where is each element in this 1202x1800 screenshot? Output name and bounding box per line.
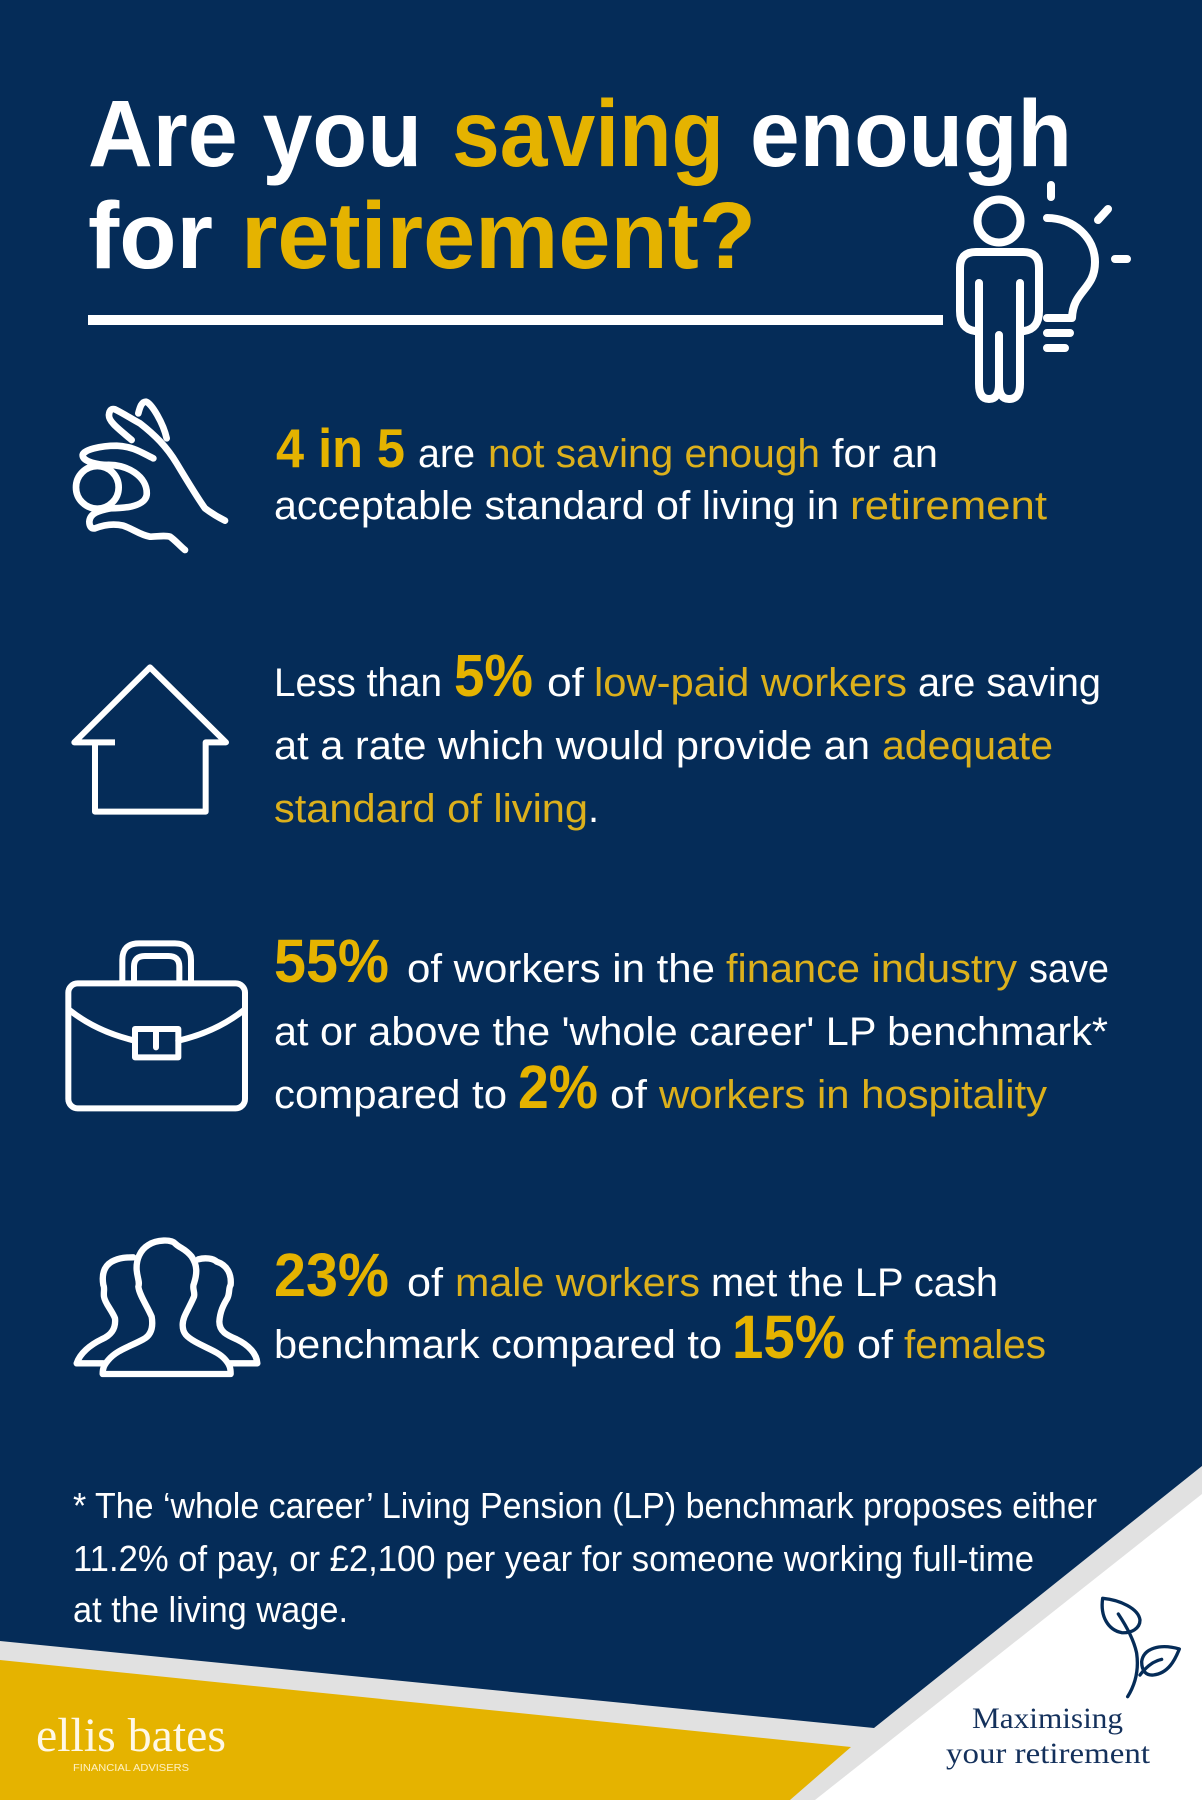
- stat: 55% vs 2%: of: [610, 1073, 648, 1117]
- logo: ellis bates: ellis bates: [36, 1709, 226, 1762]
- stat: 55% vs 2%: finance industry: [726, 947, 1017, 991]
- stat: 23% vs 15%: met the LP cash: [711, 1261, 998, 1305]
- icon: house: [74, 667, 226, 812]
- icon: person with light bulb: [960, 185, 1127, 399]
- stat: less than 5%: at a rate which would provide an: [274, 724, 870, 768]
- stat: 4 in 5: [274, 417, 1047, 528]
- stat: 55% vs 2%: save: [1029, 947, 1109, 991]
- stat: 23% vs 15%: 15%: [732, 1303, 845, 1371]
- footnote: * The ‘whole career’ Living Pension (LP) benchmark proposes either: [73, 1485, 1097, 1526]
- logo: ellis bates: FINANCIAL ADVISERS: [73, 1762, 189, 1774]
- icon: hand holding coin: [76, 402, 225, 550]
- tagline: maximising your retirement: your retirement: [946, 1737, 1151, 1770]
- stat: 4 in 5: acceptable standard of living in: [274, 484, 839, 528]
- stat: 23% vs 15%: male workers: [455, 1261, 700, 1305]
- stat: less than 5%: standard of living: [274, 787, 588, 831]
- title underline: [88, 315, 943, 325]
- icon: briefcase: [68, 943, 245, 1108]
- stat: 55% vs 2%: compared to: [274, 1073, 507, 1117]
- stat: less than 5%: adequate: [882, 724, 1053, 768]
- stat: 55% vs 2%: 2%: [518, 1053, 598, 1121]
- grey footer band: [0, 1466, 1202, 1800]
- stat: 55% vs 2%: of workers in the: [407, 947, 715, 991]
- icon: group of people: [77, 1241, 257, 1374]
- stat: 23% vs 15%: of: [857, 1323, 894, 1367]
- title: for: [88, 183, 213, 289]
- stat: less than 5%: low-paid workers: [594, 661, 907, 705]
- stat: 23% vs 15%: benchmark compared to: [274, 1323, 722, 1367]
- stat: less than 5%: [274, 643, 1101, 831]
- icon: plant sprig: [1102, 1598, 1179, 1697]
- footnote: [73, 1485, 1097, 1630]
- tagline: maximising your retirement: Maximising: [972, 1702, 1123, 1735]
- title: Are you: [88, 81, 422, 187]
- stat: less than 5%: are saving: [918, 661, 1101, 705]
- stat: 4 in 5: 4 in 5: [276, 417, 405, 479]
- title: saving: [452, 81, 724, 187]
- tagline: maximising your retirement: [946, 1702, 1151, 1770]
- gold footer panel: [0, 1660, 851, 1800]
- stat: 55% vs 2%: [274, 927, 1109, 1121]
- stat: 4 in 5: not saving enough: [488, 432, 820, 476]
- stat: 23% vs 15%: 23%: [274, 1241, 389, 1309]
- stat: 55% vs 2%: 55%: [274, 927, 389, 995]
- stat: 23% vs 15%: of: [407, 1261, 444, 1305]
- stat: less than 5%: Less than: [274, 661, 442, 705]
- stat: less than 5%: 5%: [454, 643, 533, 709]
- stat: 23% vs 15%: [274, 1241, 1046, 1371]
- stat: 4 in 5: for an: [832, 432, 938, 476]
- stat: less than 5%: .: [588, 787, 599, 831]
- stat: 55% vs 2%: at or above the 'whole career' LP benchmark*: [274, 1010, 1108, 1054]
- title: [88, 81, 1072, 289]
- footnote: 11.2% of pay, or £2,100 per year for someone working full-time: [73, 1538, 1034, 1579]
- stat: less than 5%: of: [547, 661, 585, 705]
- title: retirement?: [241, 183, 756, 289]
- footnote: at the living wage.: [73, 1589, 348, 1630]
- stat: 23% vs 15%: females: [904, 1323, 1046, 1367]
- stat: 55% vs 2%: workers in hospitality: [658, 1073, 1047, 1117]
- title: enough: [750, 81, 1072, 187]
- stat: 4 in 5: retirement: [850, 484, 1047, 528]
- white corner panel: [815, 1494, 1202, 1800]
- stat: 4 in 5: are: [418, 432, 475, 476]
